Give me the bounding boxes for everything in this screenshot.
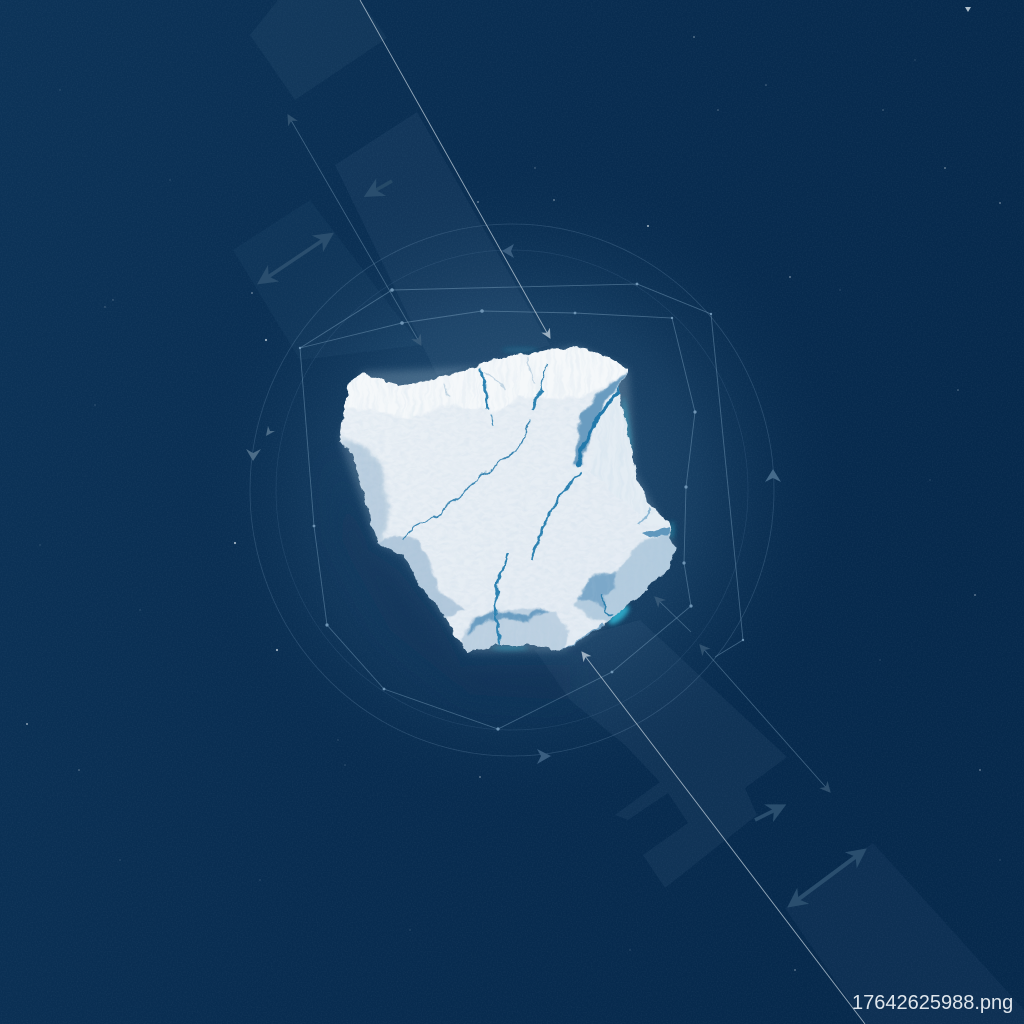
right bottom dark patch	[577, 572, 615, 608]
thin arrow: lower right short	[655, 597, 691, 632]
right bottom slope shading	[575, 533, 680, 622]
upper right slab shading	[573, 372, 628, 466]
iceberg halo	[340, 346, 675, 652]
bottom bay shading	[460, 608, 568, 655]
ring arrowhead: right	[765, 469, 781, 482]
thick double arrow: upper left	[262, 236, 329, 281]
thin arrow: upper left double	[288, 115, 421, 345]
crack 2	[403, 363, 547, 540]
ice texture	[342, 399, 622, 624]
ring arrowhead: left small	[266, 426, 275, 436]
filename label: 17642625988.png	[852, 992, 1013, 1014]
slope streak texture	[346, 348, 646, 618]
band: upper left	[233, 200, 420, 360]
band: lower centre	[535, 620, 787, 888]
central glow	[200, 165, 840, 805]
concentric rings	[250, 224, 774, 756]
band: top	[250, 0, 387, 100]
thin arrow: lower right double	[700, 645, 830, 792]
bottom bay dark rim	[466, 610, 550, 636]
faint rim streaks	[442, 356, 535, 395]
band: lower right	[785, 843, 1024, 1024]
ring arrowhead: left	[246, 449, 261, 461]
inner measurement polygon with nodes	[299, 309, 697, 731]
thick double arrow: lower right	[792, 852, 862, 904]
diagonal translucent bands	[233, 0, 1024, 1024]
thick arrow: band lower	[755, 807, 781, 820]
left slope shading	[338, 438, 389, 545]
rim edge bottom right	[563, 624, 603, 652]
outer measurement polygon	[300, 283, 744, 657]
thick arrow: band upper	[369, 181, 392, 194]
long white arrow: from bottom to iceberg	[582, 652, 865, 1024]
right bright face	[620, 398, 670, 524]
iceberg	[330, 340, 685, 700]
band: upper centre	[335, 112, 550, 375]
teal water glow	[492, 348, 675, 650]
crack 3	[578, 388, 620, 467]
iceberg body with rough edge	[330, 340, 685, 660]
iceberg shadow	[335, 450, 570, 700]
crack 1	[480, 368, 487, 410]
lower left slope shading	[375, 535, 466, 618]
crack 4	[496, 553, 507, 645]
long white arrow: from top to iceberg	[360, 0, 550, 338]
ring arrowhead: bottom	[537, 749, 551, 764]
bright upper rim	[345, 345, 630, 419]
ring arrowhead: top	[502, 244, 514, 258]
ledge	[641, 527, 669, 538]
